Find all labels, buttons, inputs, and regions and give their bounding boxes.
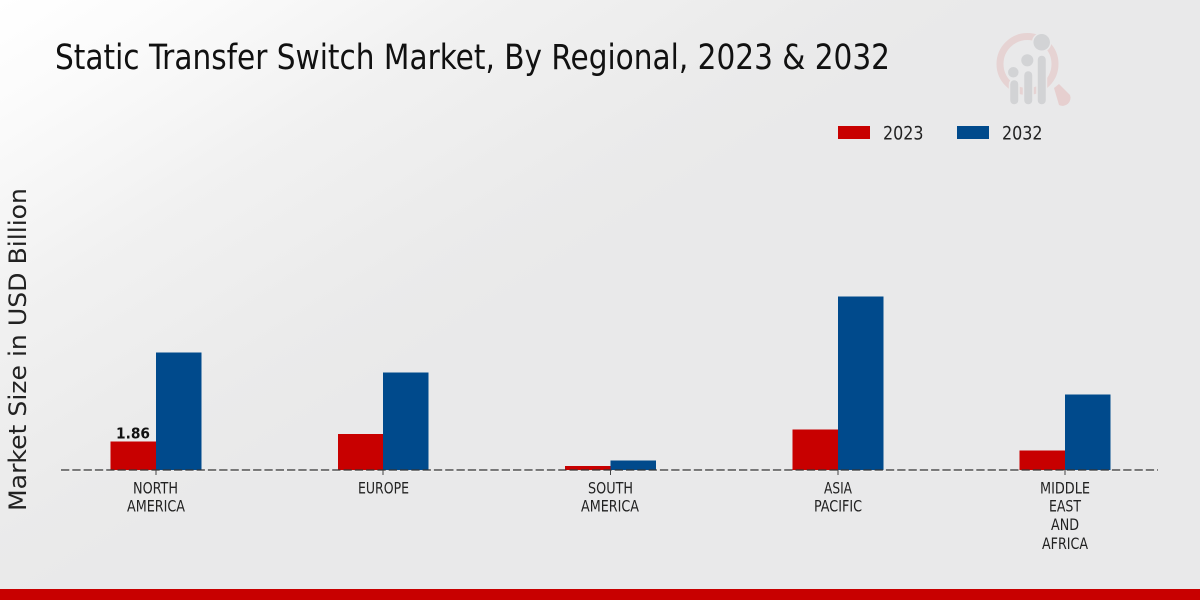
x axis labels: AFRICA [1042,534,1088,553]
x axis labels: NORTH [133,478,178,498]
bars: North America [110,352,202,470]
legend [838,122,1042,144]
x axis labels: PACIFIC [814,496,862,516]
footer bar [0,589,1200,600]
x axis labels: AND [1051,515,1079,534]
x axis labels: EAST [1049,496,1081,516]
x axis labels [127,478,1090,553]
x axis labels: AMERICA [581,496,639,516]
y axis label: Market Size in USD Billion [4,188,32,511]
title: Static Transfer Switch Market, By Regional, 2023 & 2032 [55,38,890,78]
x axis labels: AMERICA [127,496,185,516]
bars: Europe [338,372,428,470]
bars: Asia Pacific [792,296,884,470]
bars: South America [565,460,656,470]
x axis labels: EUROPE [358,478,409,498]
x axis labels: ASIA [824,478,852,498]
x axis labels: SOUTH [588,478,633,498]
x axis labels: MIDDLE [1040,478,1090,498]
legend: 2023 [883,122,924,144]
bars: Middle East and Africa [1020,394,1110,470]
value label: 1.86 [116,424,150,442]
icon: watermark logo [1000,33,1071,106]
legend: 2032 [1002,122,1042,144]
bar chart [61,296,1158,475]
